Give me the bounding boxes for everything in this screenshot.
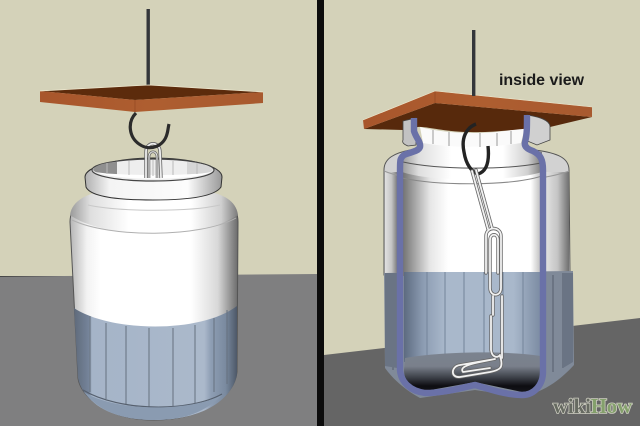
board bbox=[40, 85, 263, 112]
paper clip bbox=[146, 144, 161, 178]
jar rim bbox=[85, 158, 222, 200]
floor bbox=[324, 318, 640, 426]
water band outer bbox=[384, 271, 574, 398]
dark bottom bbox=[404, 352, 541, 392]
panel: right scene bbox=[324, 0, 640, 426]
jar outer cutaway bbox=[384, 150, 574, 398]
neck left and right bbox=[403, 115, 550, 146]
floor bbox=[0, 274, 317, 426]
panel: left scene bbox=[0, 0, 317, 426]
wall bbox=[324, 0, 640, 360]
jar body bbox=[70, 191, 238, 420]
rod bbox=[146, 9, 150, 92]
wall bbox=[0, 0, 317, 276]
paper clip chain bbox=[453, 170, 502, 377]
hook bbox=[130, 113, 169, 148]
rod bbox=[472, 30, 475, 96]
water band bbox=[74, 306, 237, 420]
board bbox=[363, 91, 592, 132]
water inside bbox=[404, 272, 541, 362]
jar interior bbox=[402, 127, 542, 392]
logo: wikiHow: wikiHow bbox=[553, 394, 633, 418]
jar wall cross-section bbox=[400, 115, 543, 395]
hook bbox=[463, 124, 488, 174]
label: inside view: inside view bbox=[499, 72, 585, 89]
